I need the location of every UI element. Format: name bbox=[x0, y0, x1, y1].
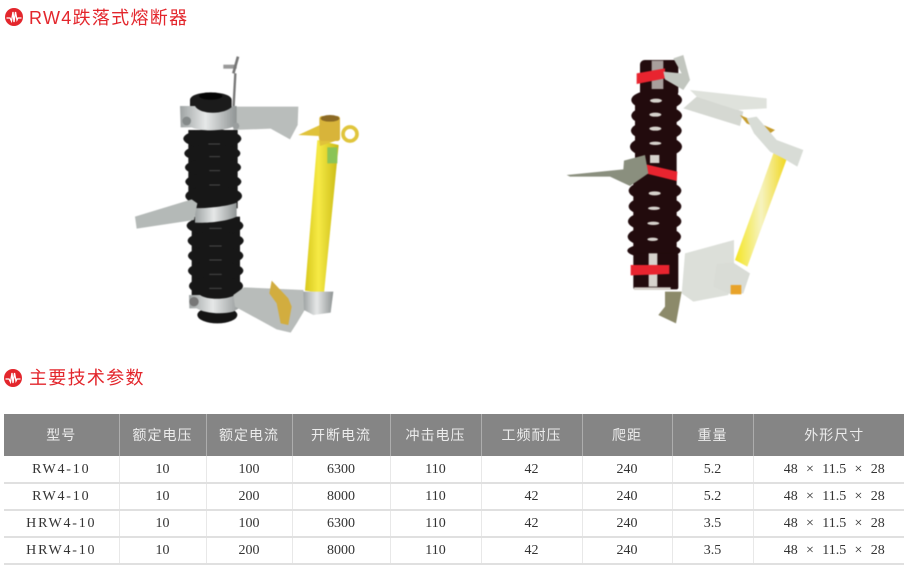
table: technical parameters: 42 bbox=[524, 543, 538, 558]
table: technical parameters: 5.2 bbox=[704, 462, 721, 477]
table: technical parameters: 48 × 11.5 × 28 bbox=[784, 516, 885, 531]
table: technical parameters: 10 bbox=[156, 489, 170, 504]
table: technical parameters: 10 bbox=[156, 516, 170, 531]
top wire bbox=[223, 57, 238, 112]
table: technical parameters: 240 bbox=[616, 516, 638, 531]
illustration: brown insulator fuse bbox=[566, 54, 804, 324]
top arm bbox=[683, 90, 775, 133]
table: technical parameters: 开断电流 bbox=[311, 427, 371, 443]
table: technical parameters: 110 bbox=[425, 516, 446, 531]
table: technical parameters: 5.2 bbox=[704, 489, 721, 504]
top cap bbox=[190, 92, 232, 113]
table: technical parameters: 100 bbox=[238, 462, 260, 477]
table: technical parameters: 额定电压 bbox=[132, 427, 192, 443]
icon: red pulse badge top bbox=[5, 8, 23, 26]
table: technical parameters: 工频耐压 bbox=[502, 427, 562, 443]
insulator highlights bbox=[634, 61, 671, 290]
table: technical parameters: 型号 bbox=[46, 427, 76, 443]
table: technical parameters: 10 bbox=[156, 543, 170, 558]
top hardware bbox=[663, 55, 690, 90]
lower plate bbox=[682, 240, 734, 302]
table: technical parameters: 42 bbox=[524, 489, 538, 504]
table: technical parameters: 外形尺寸 bbox=[804, 427, 864, 443]
yellow fuse tube bbox=[305, 140, 339, 293]
icon: red pulse badge lower bbox=[4, 369, 22, 387]
insulator lower bbox=[627, 173, 681, 289]
table: technical parameters: 6300 bbox=[327, 516, 355, 531]
table: technical parameters: 240 bbox=[616, 543, 638, 558]
heading: RW4 fuse title: RW4跌落式熔断器 bbox=[29, 8, 188, 28]
table: technical parameters: 42 bbox=[524, 462, 538, 477]
left mounting bracket bbox=[135, 199, 197, 229]
table: technical parameters: 3.5 bbox=[704, 543, 721, 558]
lower arm bbox=[233, 287, 307, 333]
table: technical parameters: 110 bbox=[425, 462, 446, 477]
table: technical parameters: 110 bbox=[425, 489, 446, 504]
illustration: black insulator fuse bbox=[134, 56, 360, 333]
table: technical parameters: 冲击电压 bbox=[406, 427, 466, 443]
red band middle bbox=[642, 163, 677, 181]
upper insulator bbox=[183, 129, 242, 208]
top arm bbox=[233, 107, 298, 139]
centre band bbox=[195, 203, 237, 223]
table: technical parameters: 240 bbox=[616, 462, 638, 477]
heading: main technical parameters: 主要技术参数 bbox=[29, 368, 145, 388]
tube bottom fitting bbox=[713, 263, 750, 294]
table: technical parameters: HRW4-10 bbox=[26, 543, 96, 558]
insulator upper bbox=[630, 60, 682, 177]
lower insulator bbox=[187, 216, 244, 300]
brass top fitting bbox=[298, 115, 357, 146]
tube top fitting bbox=[747, 117, 803, 167]
table: technical parameters: 8000 bbox=[327, 489, 355, 504]
red band top bbox=[637, 68, 665, 84]
yellow fuse tube bbox=[735, 152, 787, 267]
table: technical parameters bbox=[4, 414, 904, 565]
table: technical parameters: 额定电流 bbox=[219, 427, 279, 443]
table: technical parameters: 42 bbox=[524, 516, 538, 531]
left bracket bbox=[567, 155, 648, 186]
table: technical parameters: 48 × 11.5 × 28 bbox=[784, 543, 885, 558]
table: technical parameters: 重量 bbox=[698, 427, 728, 443]
table: technical parameters: 3.5 bbox=[704, 516, 721, 531]
table: technical parameters: 100 bbox=[238, 516, 260, 531]
tube bottom ring bbox=[303, 292, 333, 315]
table: technical parameters: 8000 bbox=[327, 543, 355, 558]
bottom clamp bbox=[189, 295, 242, 323]
green label bbox=[327, 147, 337, 163]
table: technical parameters: 48 × 11.5 × 28 bbox=[784, 489, 885, 504]
table: technical parameters: 200 bbox=[238, 489, 260, 504]
table: technical parameters: RW4-10 bbox=[32, 489, 90, 504]
table: technical parameters: 240 bbox=[616, 489, 638, 504]
table: technical parameters: 48 × 11.5 × 28 bbox=[784, 462, 885, 477]
table: technical parameters: RW4-10 bbox=[32, 462, 90, 477]
brass latch bbox=[269, 281, 292, 325]
table: technical parameters: 10 bbox=[156, 462, 170, 477]
table: technical parameters: 200 bbox=[238, 543, 260, 558]
table: technical parameters: 6300 bbox=[327, 462, 355, 477]
insulator sheen bbox=[208, 144, 222, 288]
lower hardware bbox=[658, 292, 682, 323]
red band bottom bbox=[631, 265, 669, 275]
table: technical parameters: 110 bbox=[425, 543, 446, 558]
top clamp bbox=[180, 106, 239, 130]
table: technical parameters: 爬距 bbox=[612, 427, 642, 443]
table: technical parameters: HRW4-10 bbox=[26, 516, 96, 531]
